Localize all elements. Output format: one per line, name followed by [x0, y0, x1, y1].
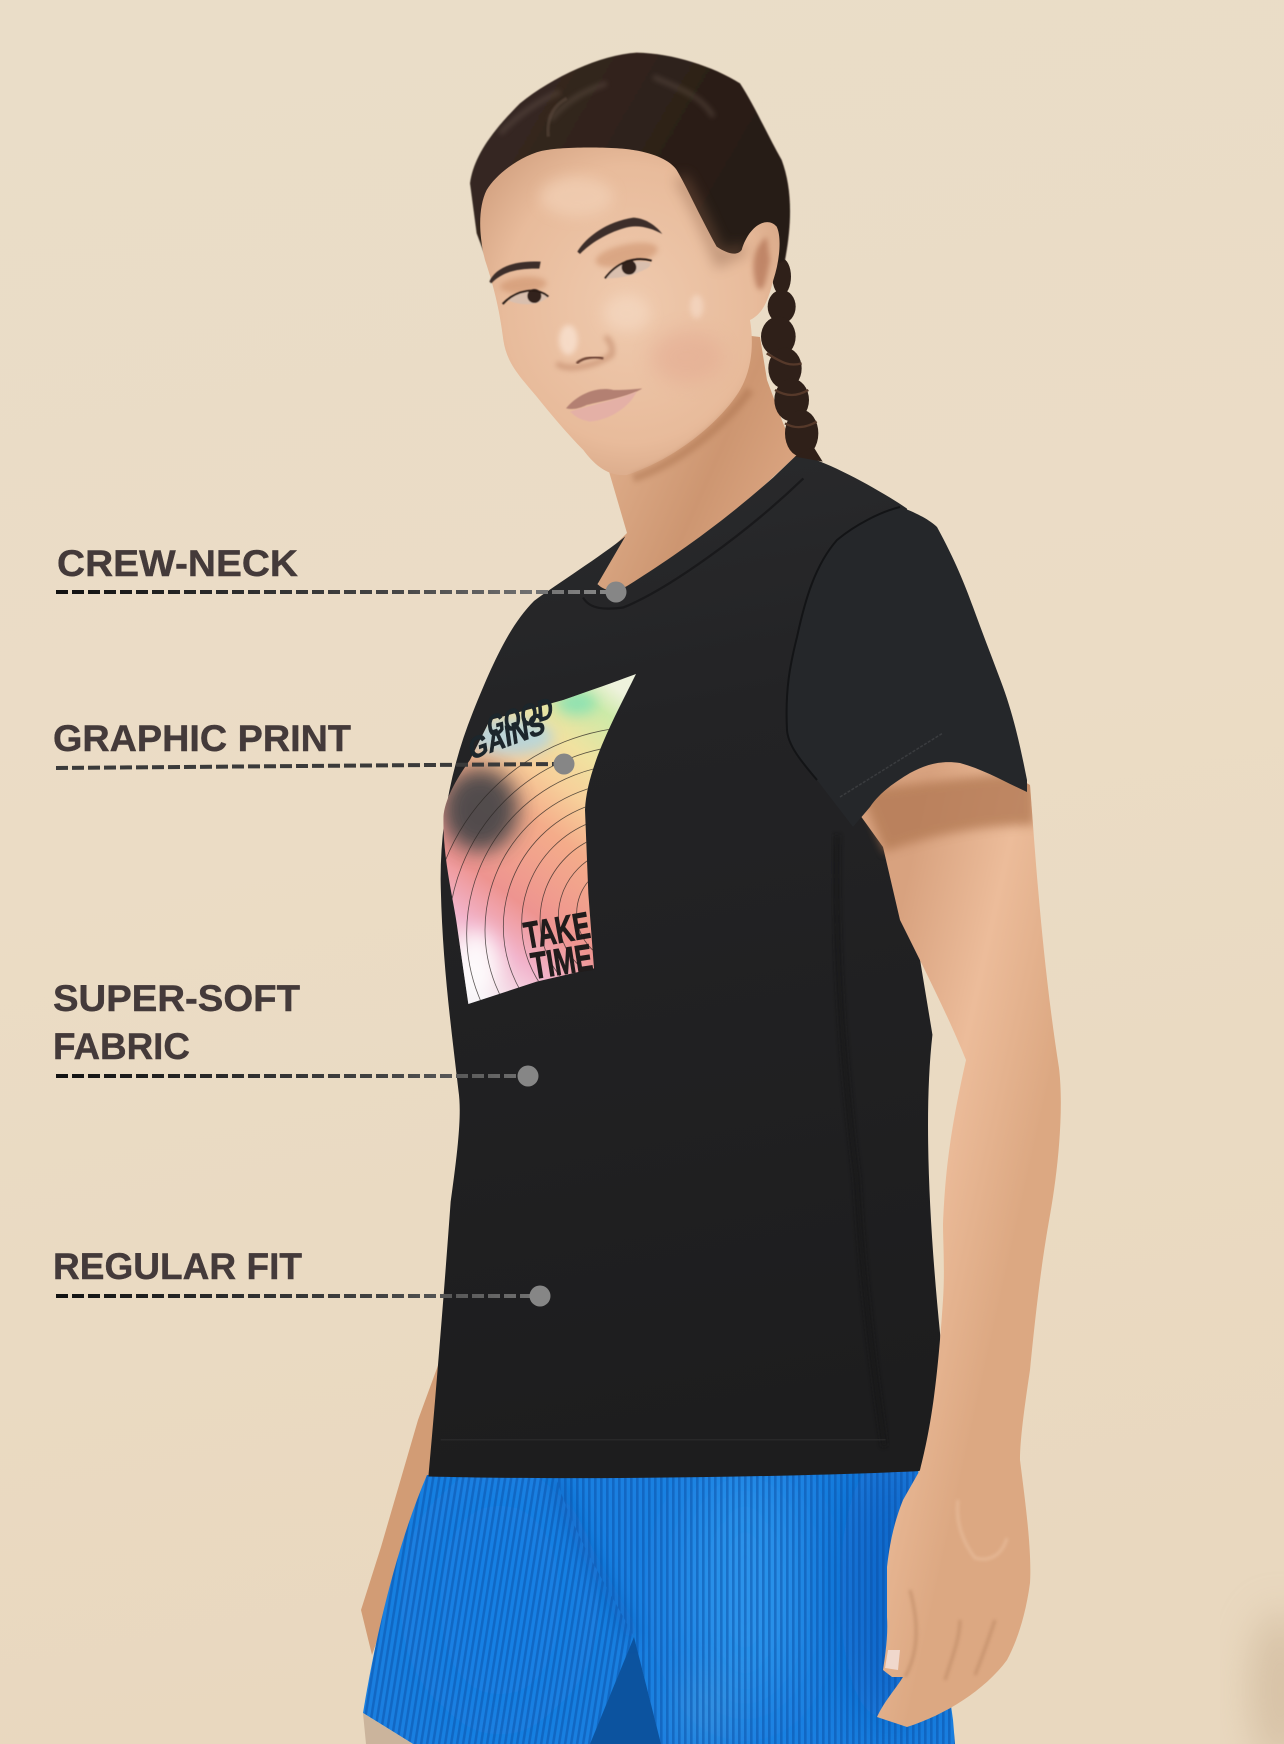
forehead shadow under hairline: [680, 177, 743, 260]
hair highlights: [500, 77, 713, 133]
under-sleeve arm shadow: [860, 770, 1035, 852]
blue shorts: [363, 1471, 955, 1744]
left eye socket tint: [499, 275, 547, 295]
print text: take time: TIME: [528, 936, 595, 987]
hand details: [905, 1590, 995, 1680]
centre parting: [548, 98, 567, 137]
t-shirt torso: [428, 454, 946, 1478]
shorts inner leg: [590, 1637, 661, 1744]
right arm and hand: [860, 745, 1061, 1727]
print gradient area: [443, 674, 636, 1004]
callout: regular fit: REGULAR FIT: [53, 1246, 302, 1287]
crotch seam shadow: [556, 1477, 634, 1637]
print text: good gains: GOOD: [486, 691, 554, 744]
face: [480, 147, 780, 475]
under-eye highlight: [603, 295, 650, 332]
forehead highlight: [540, 177, 613, 217]
graphic print on shirt: [443, 674, 636, 1004]
callout: graphic print: [53, 718, 574, 774]
left arm: [361, 1360, 440, 1655]
sleeve: [787, 507, 1027, 827]
hand veins: [957, 1500, 1007, 1559]
callout: super-soft fabric: FABRIC: [53, 1026, 190, 1067]
neck: [597, 330, 797, 600]
background shadow bottom right: [1250, 1610, 1284, 1744]
right eyebrow: [577, 218, 662, 254]
sleeve hem stitching: [840, 733, 943, 797]
cheek highlight: [690, 295, 703, 319]
model figure: [350, 53, 1061, 1744]
left eye: [503, 289, 548, 304]
callout: regular fit: [53, 1246, 550, 1306]
lower lip: [570, 392, 637, 422]
nostril: [577, 357, 603, 363]
callout: super-soft fabric: SUPER-SOFT: [53, 978, 300, 1019]
callout: super-soft fabric: [53, 978, 538, 1086]
left leg: [363, 1713, 413, 1744]
hair: [470, 53, 790, 273]
print text: good gains: GAINS: [467, 707, 547, 767]
thumb nail: [885, 1650, 900, 1670]
jaw shadow on neck: [633, 390, 750, 478]
callout: crew-neck: CREW-NECK: [57, 543, 298, 584]
inner ear: [753, 237, 770, 290]
shirt hem stitching: [441, 1439, 886, 1441]
callout: crew-neck: [56, 543, 626, 602]
upper lip: [566, 388, 642, 409]
right eye socket tint: [593, 238, 660, 272]
callout: graphic print: GRAPHIC PRINT: [53, 718, 351, 759]
nose shadow: [557, 337, 612, 367]
left eyebrow: [489, 261, 541, 283]
print text: take time: TAKE: [521, 904, 593, 957]
collar seam: [583, 478, 803, 609]
nose highlight: [559, 325, 578, 355]
labels and pointers: [53, 543, 626, 1306]
head: [470, 53, 790, 478]
braid: [761, 258, 823, 462]
print text: take time: [521, 904, 595, 987]
armhole seam: [787, 507, 900, 780]
cheek blush: [650, 330, 723, 383]
torso side fold: [836, 835, 885, 1447]
right eye: [605, 259, 652, 278]
